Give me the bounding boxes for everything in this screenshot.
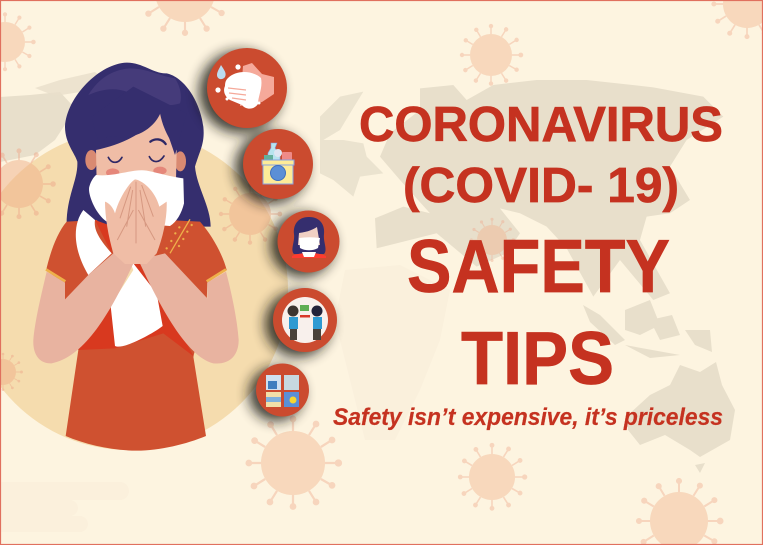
scarf over face [89,170,184,226]
heading: covid-19: (COVID- 19) [403,159,679,213]
woman [33,63,239,451]
viruses over circle [0,149,282,391]
virus centre bottom [247,417,341,509]
virus bottom right [637,479,722,545]
tip icons [207,48,340,416]
collar stripe and buttons [166,219,193,253]
icon: social distancing [273,288,337,352]
neck [110,173,167,240]
map: north america [0,92,72,162]
virus behind title [470,218,514,261]
dress shadow [78,220,194,357]
virus top right [712,0,763,38]
virus bottom [459,444,526,510]
heading: safety: SAFETY [407,224,670,308]
icon: hand washing [207,48,287,128]
right arm [138,253,239,364]
map: tasmania [695,463,705,473]
icon: woman with mask [278,210,340,272]
cloud decoration [0,482,129,532]
icon: cleaning surfaces [256,364,309,416]
virus centre top [461,25,522,85]
map: asia [375,80,723,300]
map: australia [628,362,735,457]
dress [46,220,227,451]
sleeve trim right [207,269,226,281]
sleeve trim left [46,269,65,281]
ear left [85,150,97,170]
tagline: Safety isn’t expensive, it’s priceless [333,404,723,431]
map: europe [320,92,383,197]
finger lines [117,182,155,243]
scarf tail [76,210,163,347]
fringe [92,87,187,155]
icon: sanitizer box [243,129,313,199]
left arm [33,253,135,363]
map: africa [335,265,450,440]
heading: coronavirus: CORONAVIRUS [359,98,723,152]
eyes and brow [108,139,166,162]
heading: tips: TIPS [461,316,614,400]
title [333,98,723,431]
map: arctic islands [35,72,105,96]
virus centre [220,184,282,244]
virus left top [0,13,35,71]
virus top left [142,0,230,35]
virus low left [0,353,22,391]
face [96,113,177,183]
peach circle [0,130,288,450]
ear right [175,151,186,171]
virus left [0,149,55,218]
scarf tail shade [108,263,133,305]
map: southeast asian islands [583,300,712,358]
hands [105,179,167,264]
blush [106,168,119,177]
hair [65,63,211,227]
blush right [153,167,167,175]
icon shadows [199,51,334,421]
hair highlight [88,68,181,105]
world map [0,72,735,473]
